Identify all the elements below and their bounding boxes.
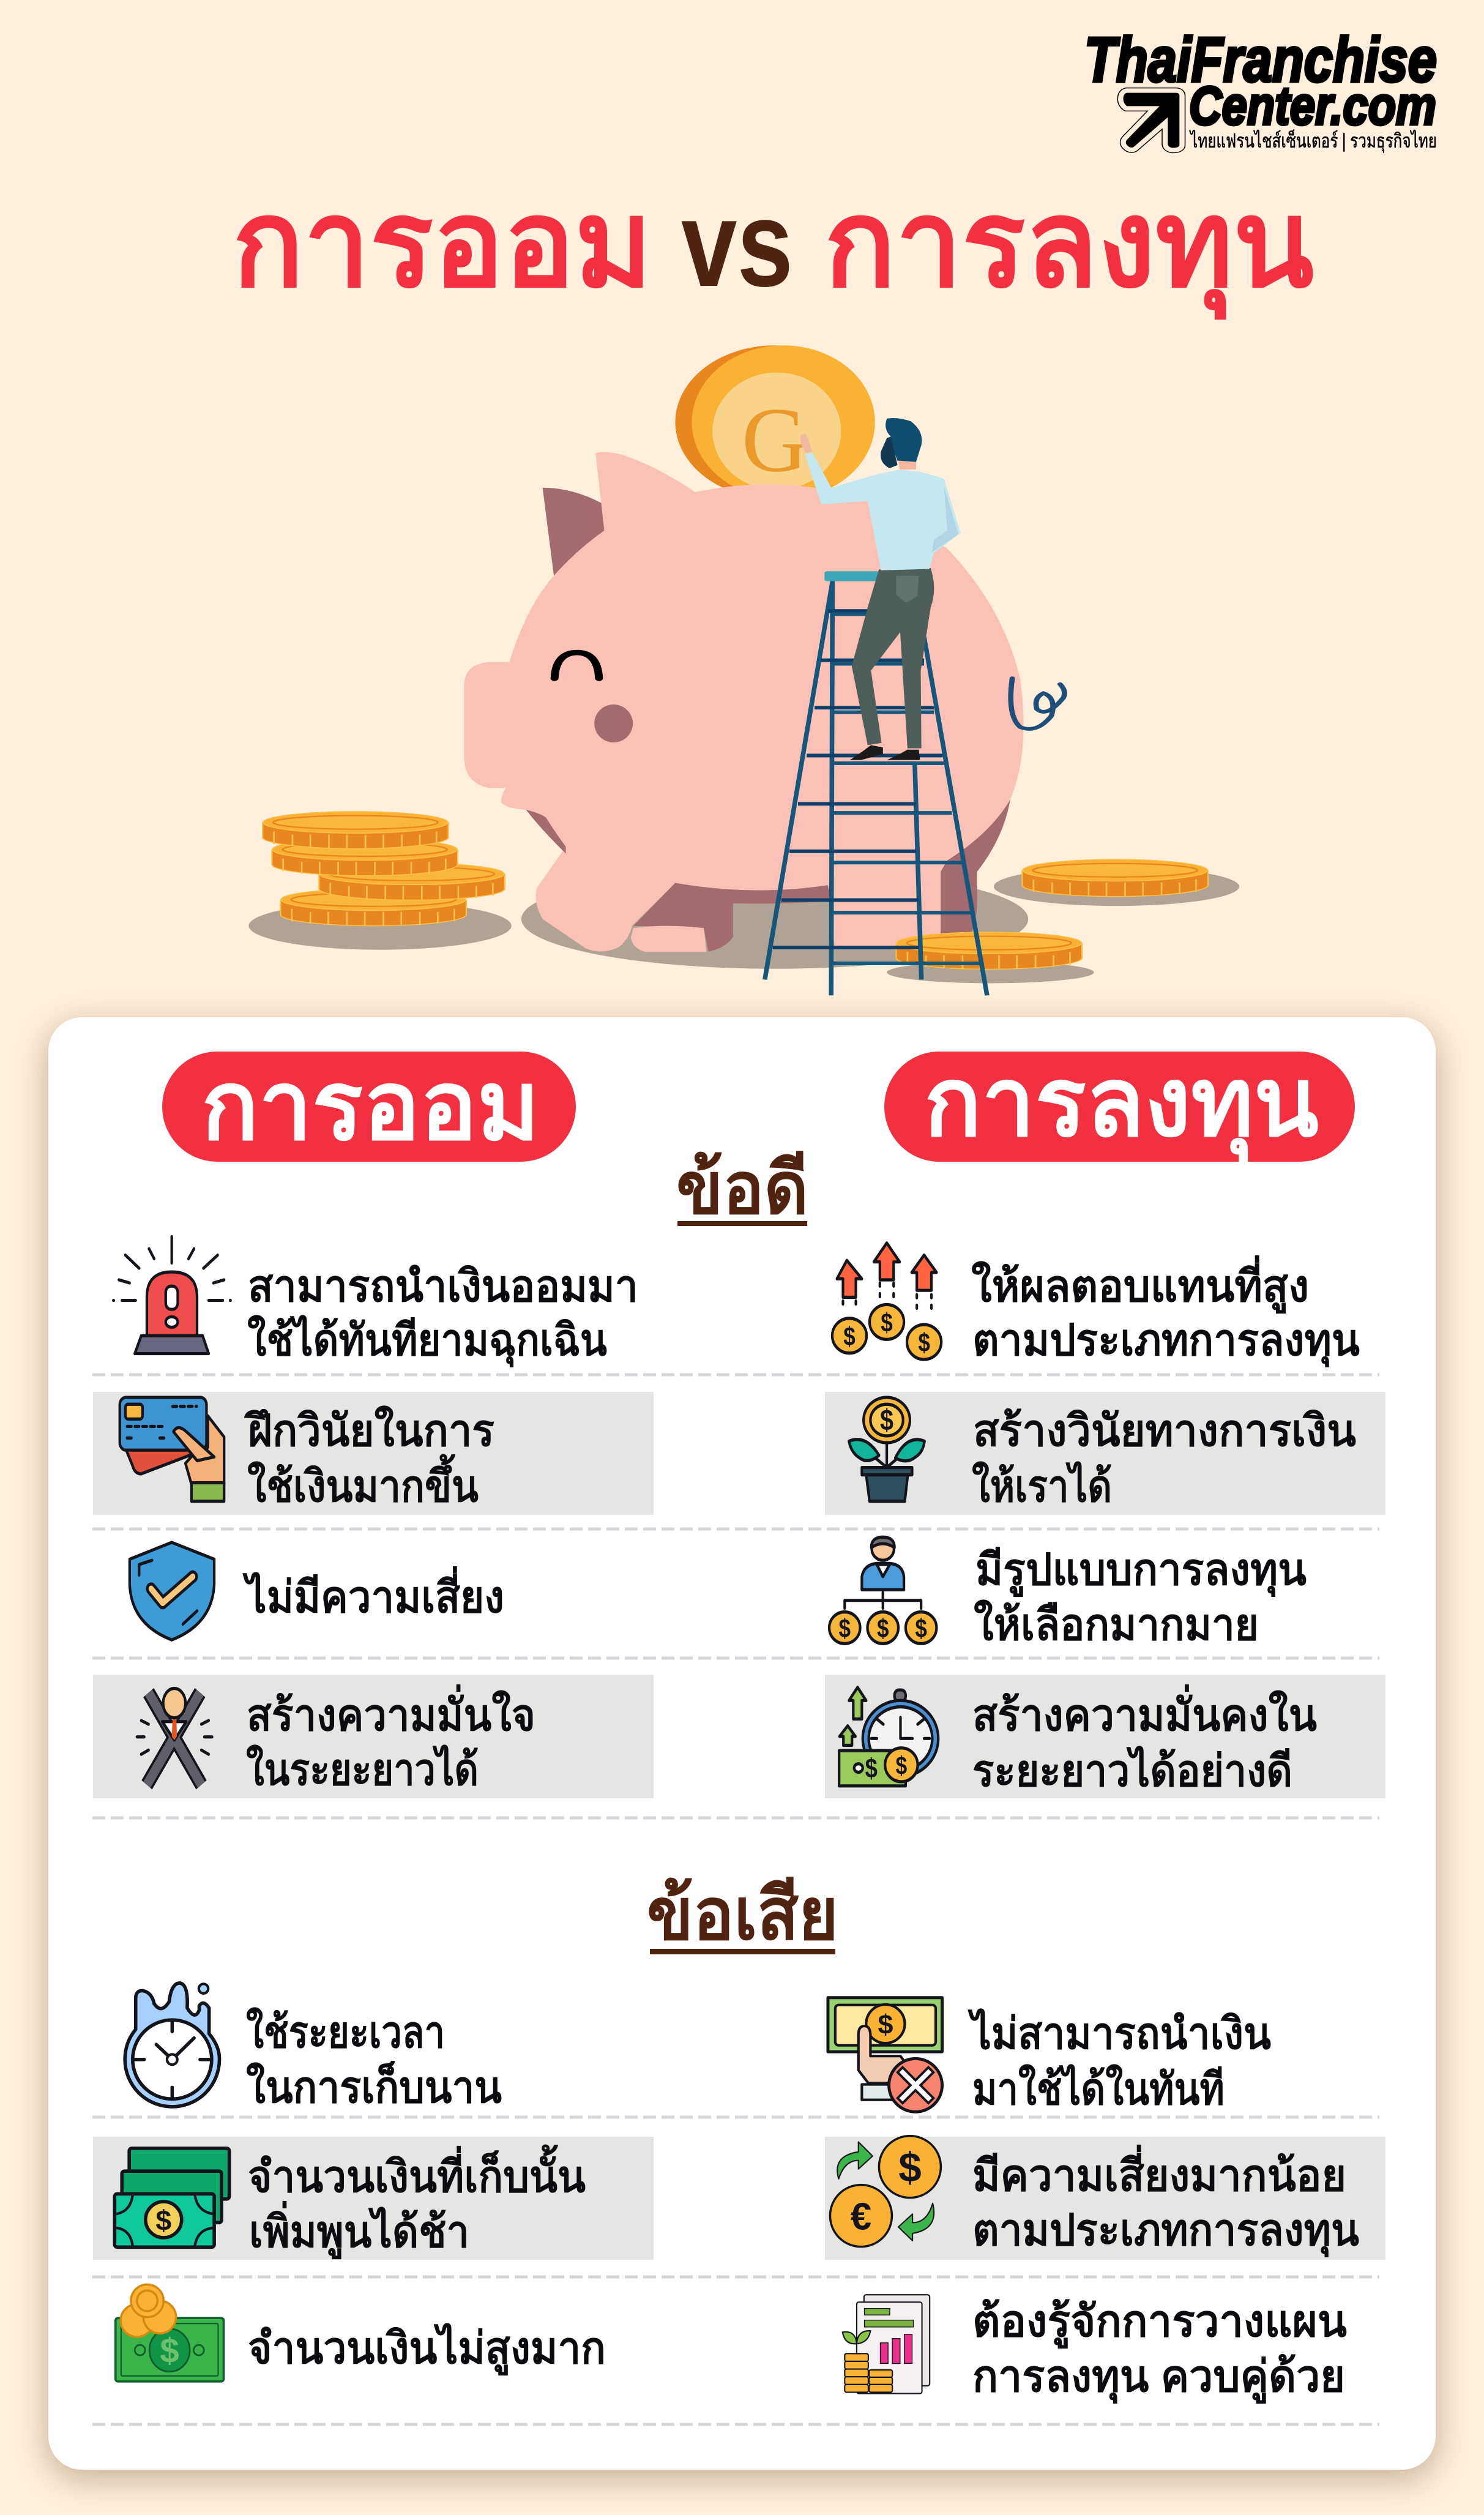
saving disadvantage 2: [114, 2145, 586, 2259]
pig: eye: [554, 652, 599, 678]
text: ใช้ระยะเวลา: [246, 2008, 445, 2057]
icon: logo arrow: [1123, 93, 1179, 148]
saving advantage 1: [113, 1236, 638, 1367]
man: pants: [852, 568, 934, 749]
heading: advantages: ข้อดี: [676, 1148, 808, 1229]
text: สามารถนำเงินออมมา: [248, 1262, 638, 1311]
icon: melting clock: [125, 1983, 220, 2107]
icon: rising coins: [832, 1243, 941, 1359]
icon: rising coins: $: [843, 1321, 856, 1351]
saving advantage 4: [137, 1685, 535, 1795]
icon: rising coins: $: [918, 1328, 930, 1358]
icon: currency exchange: $: [898, 2145, 922, 2191]
gold coin entering slot: [675, 345, 875, 499]
gold coin entering slot: G: [742, 389, 808, 491]
text: ต้องรู้จักการวางแผน: [972, 2297, 1347, 2348]
icon: person with investment choices: $: [877, 1614, 889, 1643]
investment disadvantage 2: [830, 2136, 1359, 2257]
text: ไม่มีความเสี่ยง: [243, 1567, 504, 1622]
ladder top platform: [824, 571, 883, 581]
pig: cheek: [594, 704, 633, 742]
icon: banknote with coins: $: [160, 2331, 179, 2370]
logo: ThaiFranchise Center.com: [1084, 24, 1437, 153]
man: beard and hair: [886, 418, 922, 462]
icon: hand, banknote and cross: [828, 1998, 942, 2112]
row backgrounds: [93, 1392, 1385, 2260]
investment advantage 2: ให้เราได้: [972, 1462, 1112, 1511]
text: สร้างวินัยทางการเงิน: [973, 1407, 1356, 1456]
text: สร้างความมั่นคงใน: [972, 1685, 1317, 1740]
investment advantage 4: [839, 1685, 1317, 1796]
pig: front foot: [631, 926, 706, 952]
investment advantage 1: ตามประเภทการลงทุน: [972, 1316, 1360, 1367]
pig: tail: [1011, 678, 1064, 729]
icon: clock with money: $: [865, 1752, 878, 1784]
investment advantage 2: [849, 1397, 1356, 1511]
man on ladder: [800, 418, 961, 760]
icon: stacked banknotes: [114, 2148, 229, 2247]
text: ให้ผลตอบแทนที่สูง: [971, 1256, 1309, 1313]
title: [233, 176, 1314, 320]
text: สร้างความมั่นใจ: [247, 1685, 535, 1740]
icon: banknote with coins: [116, 2284, 224, 2382]
pig: body: [464, 452, 1024, 952]
icon: money plant: [849, 1397, 925, 1501]
investment disadvantage 1: [828, 1998, 1271, 2114]
investment advantage 3: ให้เลือกมากมาย: [974, 1600, 1259, 1650]
icon: stacked banknotes: $: [155, 2204, 171, 2236]
ladder: [765, 581, 987, 995]
text: ฝึกวินัยในการ: [245, 1406, 494, 1456]
man: shirt: [805, 453, 961, 570]
investment disadvantage 3: [843, 2295, 1347, 2403]
text: จำนวนเงินไม่สูงมาก: [248, 2323, 606, 2375]
text: ไม่สามารถนำเงิน: [968, 2009, 1271, 2058]
heading: disadvantages: ข้อเสีย: [647, 1874, 838, 1955]
icon: siren: [113, 1236, 231, 1354]
header: investment pill: การลงทุน: [924, 1048, 1319, 1162]
title: vs: [681, 176, 793, 312]
ground shadows: [248, 867, 1239, 983]
logo wordmark: Center.com: [1189, 75, 1436, 136]
investment disadvantage 1: มาใช้ได้ในทันที: [972, 2065, 1225, 2114]
icon: investment plan documents: [843, 2295, 930, 2394]
icon: clock with money: [839, 1687, 938, 1786]
saving disadvantage 1: ในการเก็บนาน: [246, 2061, 502, 2112]
saving advantage 4: ในระยะยาวได้: [246, 1745, 479, 1795]
pig: ear back: [543, 488, 604, 576]
man: neck and hand: [800, 433, 916, 469]
icon: person with investment choices: [829, 1537, 936, 1643]
title: การออม: [233, 176, 652, 312]
icon: person with investment choices: $: [915, 1614, 927, 1643]
title: การลงทุน: [824, 176, 1314, 320]
saving disadvantage 2: เพิ่มพูนได้ช้า: [249, 2202, 469, 2259]
pig: rear dark shapes: [941, 799, 1010, 946]
saving advantage 2: ใช้เงินมากขึ้น: [247, 1454, 479, 1511]
icon: rising coins: $: [881, 1308, 893, 1337]
investment advantage 3: [829, 1537, 1307, 1650]
investment disadvantage 2: ตามประเภทการลงทุน: [972, 2206, 1359, 2257]
icon: shield with check: [130, 1542, 214, 1640]
panel: white comparison card: [48, 1017, 1436, 2470]
pig: belly and leg shade: [633, 883, 831, 952]
text: มีรูปแบบการลงทุน: [975, 1545, 1307, 1596]
text: มีความเสี่ยงมากน้อย: [972, 2145, 1346, 2200]
saving advantage 3: [130, 1542, 504, 1640]
icon: money plant: $: [880, 1404, 893, 1437]
saving advantage 1: ใช้ได้ทันทียามฉุกเฉิน: [247, 1315, 607, 1367]
illustration: piggy bank with man on ladder: [248, 345, 1239, 995]
icon: currency exchange: €: [851, 2196, 871, 2238]
icon: credit cards in hand: [120, 1397, 224, 1501]
header: savings pill: การออม: [201, 1052, 540, 1160]
icon: person with investment choices: $: [839, 1614, 851, 1643]
icon: clock with money: $: [896, 1752, 907, 1780]
coin stacks: [263, 812, 1208, 969]
icon: hand, banknote and cross: $: [878, 2009, 893, 2040]
logo wordmark: [1084, 24, 1437, 136]
icon: confident person: [137, 1688, 212, 1785]
saving disadvantage 1: [125, 1983, 502, 2112]
investment advantage 1: [832, 1243, 1360, 1367]
saving disadvantage 3: [116, 2284, 606, 2382]
investment disadvantage 3: การลงทุน ควบคู่ด้วย: [972, 2352, 1345, 2403]
icon: currency exchange: [830, 2136, 941, 2247]
investment advantage 4: ระยะยาวได้อย่างดี: [972, 1746, 1292, 1796]
man: shoes: [850, 745, 920, 760]
saving advantage 2: [120, 1397, 494, 1511]
text: จำนวนเงินที่เก็บนั้น: [248, 2145, 586, 2202]
